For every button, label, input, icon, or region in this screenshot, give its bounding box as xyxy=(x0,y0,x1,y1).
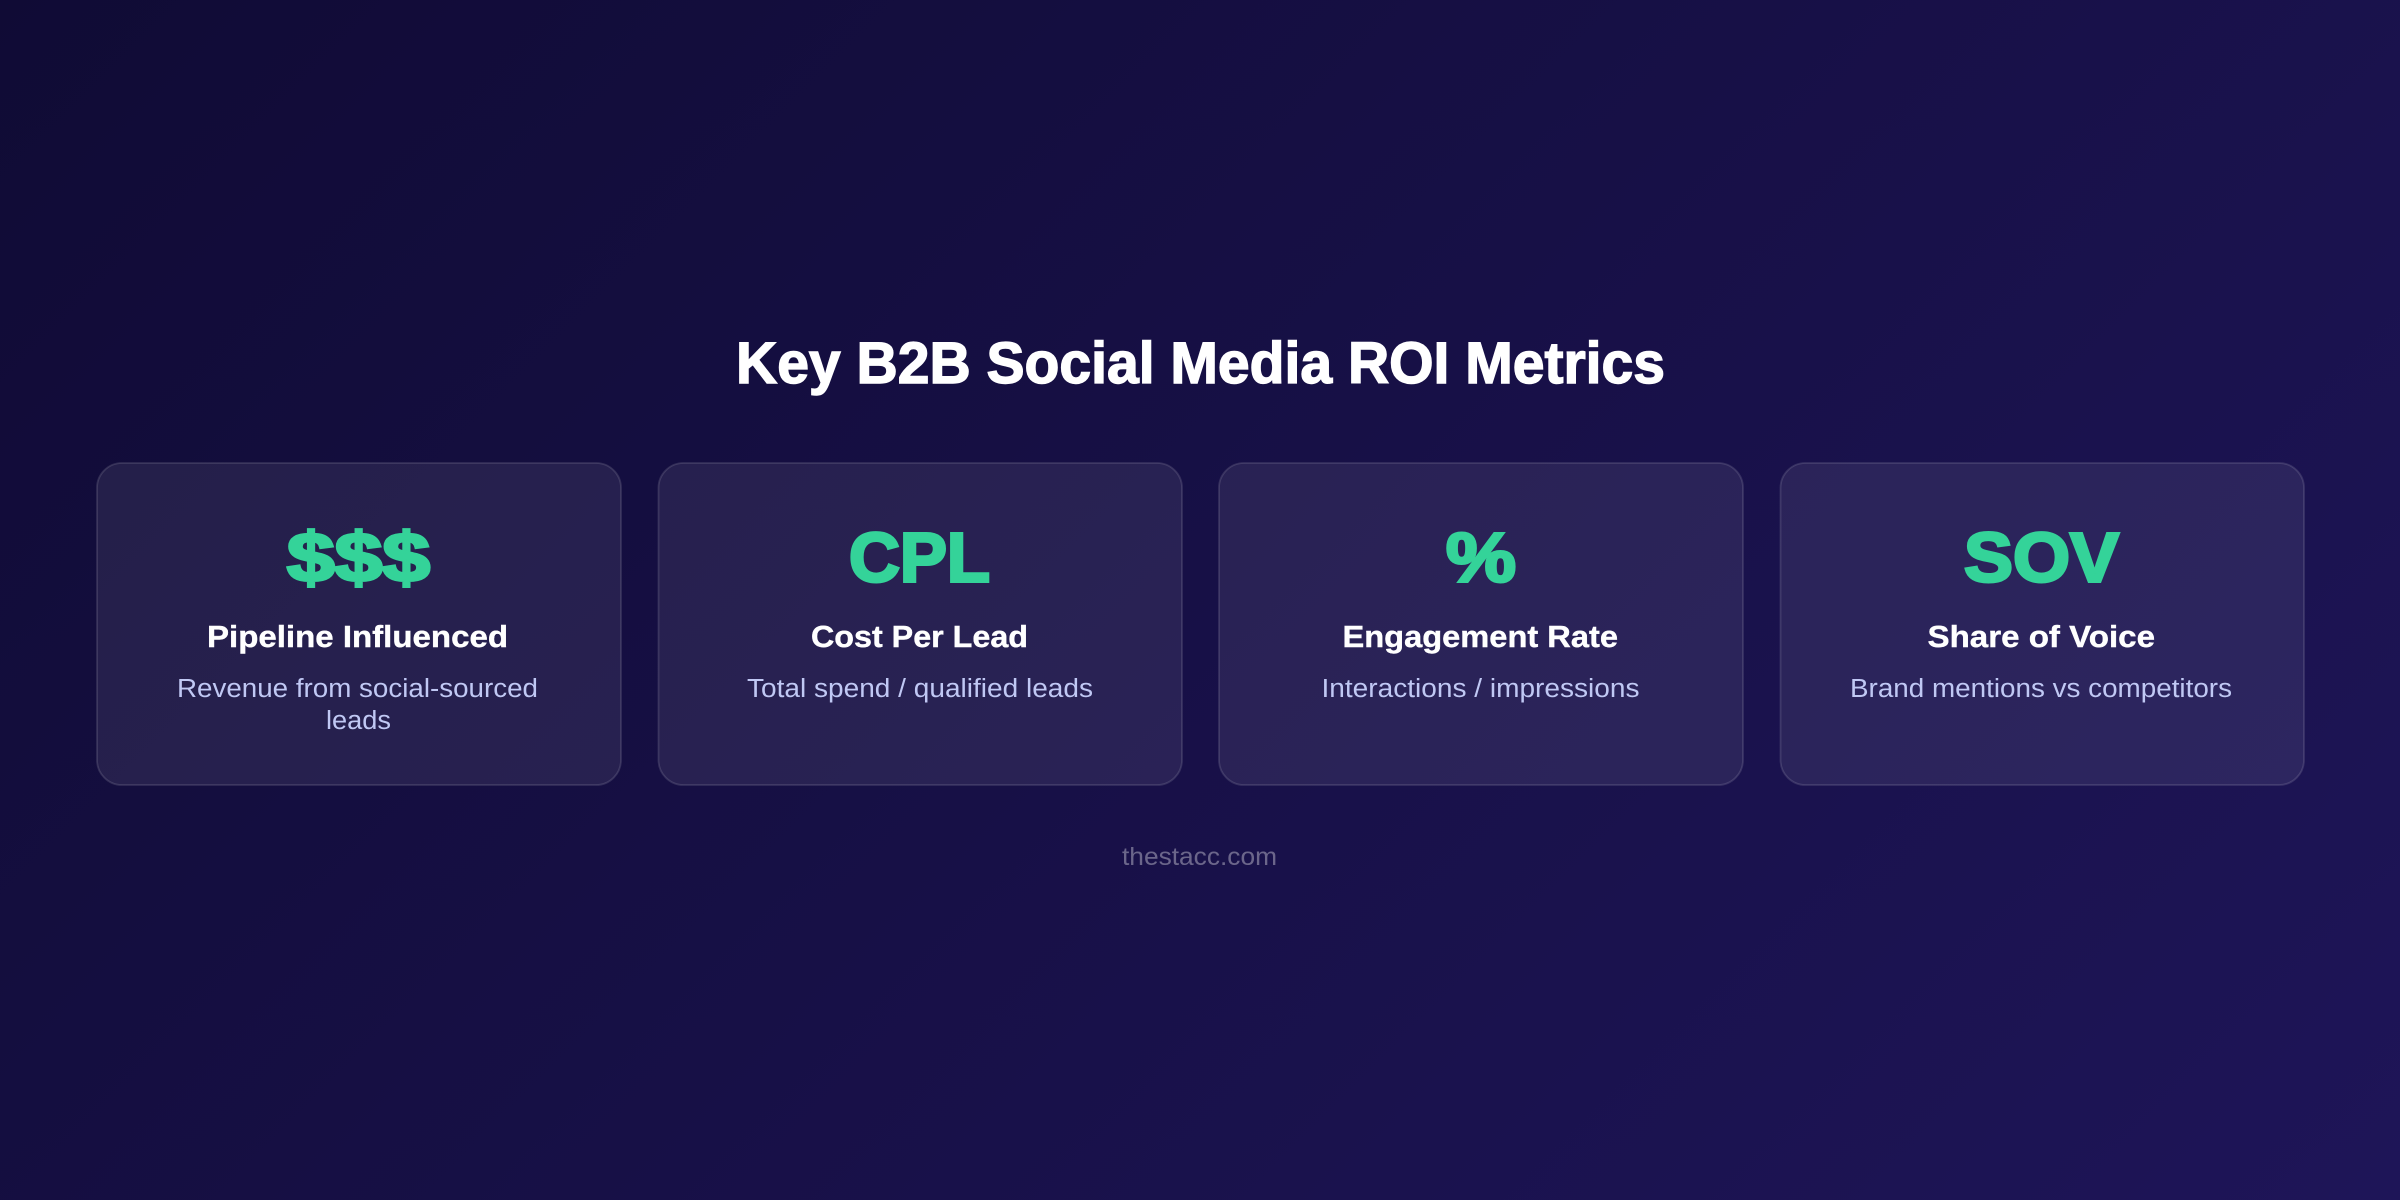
metric description: Brand mentions vs competitors xyxy=(1850,675,2232,703)
metric description second line: leads xyxy=(326,707,391,735)
title: Key B2B Social Media ROI Metrics xyxy=(736,331,1665,396)
panel: cost per lead xyxy=(658,463,1182,785)
panel: pipeline influenced xyxy=(97,463,621,785)
metric name: Pipeline Influenced xyxy=(207,619,508,654)
card box xyxy=(1219,463,1743,785)
card box xyxy=(658,463,1182,785)
card box xyxy=(97,463,621,785)
footer source: thestacc.com xyxy=(1122,843,1277,871)
card box xyxy=(1780,463,2304,785)
metric description: Revenue from social-sourced xyxy=(177,675,538,703)
metric description: Total spend / qualified leads xyxy=(747,675,1093,703)
panel: engagement rate xyxy=(1219,463,1743,785)
metric icon: dollars: $$$ xyxy=(287,518,430,596)
metric description: Interactions / impressions xyxy=(1322,675,1640,703)
metric name: Cost Per Lead xyxy=(811,619,1028,654)
metric name: Share of Voice xyxy=(1928,619,2155,654)
metric icon: percent: % xyxy=(1446,518,1516,596)
metric name: Engagement Rate xyxy=(1342,619,1618,654)
metric label: CPL: CPL xyxy=(849,518,990,596)
panel: share of voice xyxy=(1780,463,2304,785)
metric label: SOV: SOV xyxy=(1964,518,2119,596)
